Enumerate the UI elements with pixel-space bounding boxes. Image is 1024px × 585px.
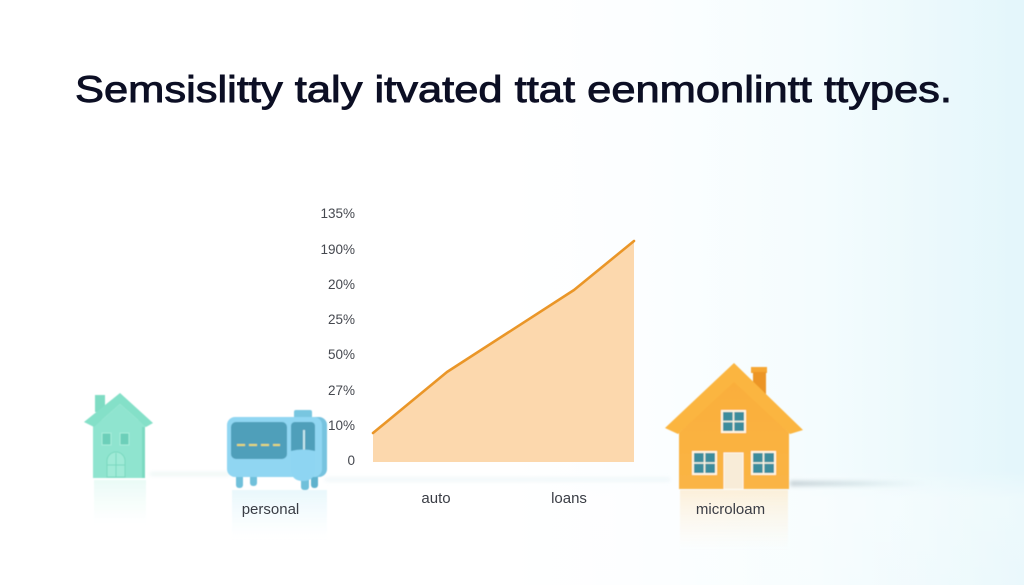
y axis labels: 190% — [320, 242, 355, 257]
icon: blue device — [227, 410, 327, 540]
right window — [751, 451, 776, 475]
x axis labels: personal — [242, 501, 299, 518]
area chart — [373, 241, 634, 462]
y axis labels: 27% — [328, 383, 355, 398]
left window — [692, 451, 717, 475]
top window — [721, 410, 746, 433]
x axis labels: loans — [551, 490, 587, 507]
y axis labels: 135% — [320, 206, 355, 221]
x axis labels: auto — [421, 490, 451, 507]
y axis labels: 50% — [328, 347, 355, 362]
y axis labels: 10% — [328, 418, 355, 433]
y axis labels: 20% — [328, 277, 355, 292]
floor shadows — [150, 473, 930, 486]
x axis labels — [242, 490, 765, 518]
x axis labels: microloam — [696, 501, 765, 518]
title: Semsislitty taly itvated ttat eenmonlintt ttypes. — [75, 68, 952, 110]
y axis labels: 0 — [347, 453, 355, 468]
door — [724, 453, 743, 489]
y axis labels — [320, 206, 355, 468]
icon: orange house — [665, 363, 803, 550]
y axis labels: 25% — [328, 312, 355, 327]
icon: green house — [84, 393, 153, 525]
